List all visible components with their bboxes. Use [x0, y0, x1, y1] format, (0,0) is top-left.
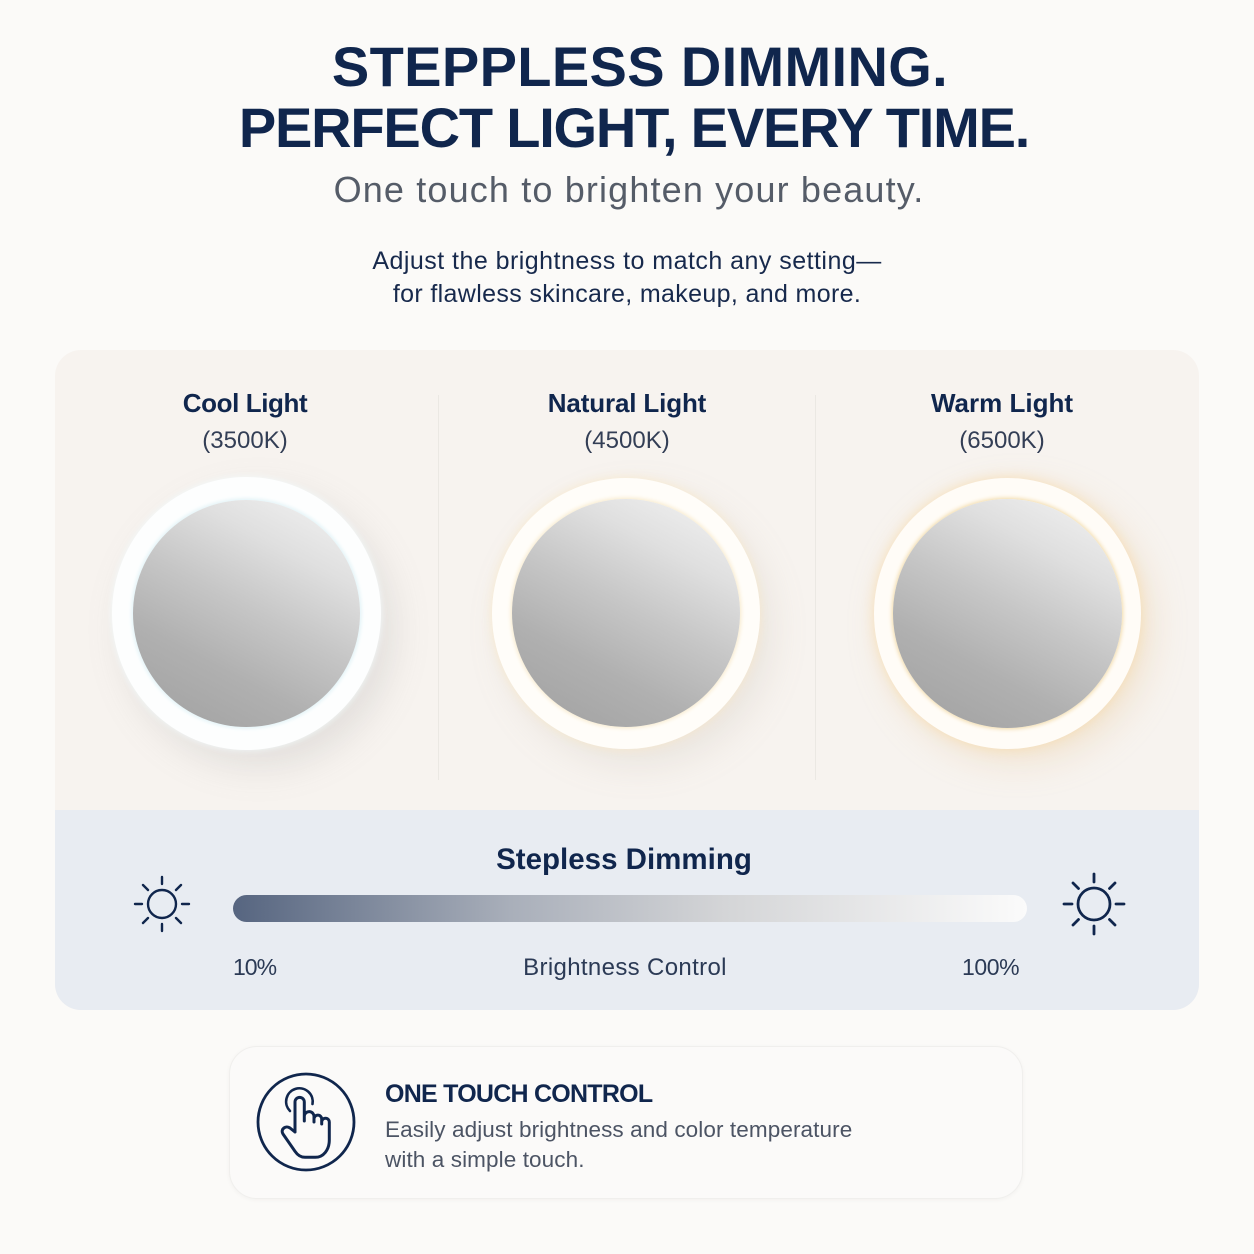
label: natural light: Natural Light: [548, 388, 706, 418]
description: for flawless skincare, makeup, and more.: [393, 280, 861, 308]
label: 10%: 10%: [233, 954, 276, 980]
label: 100%: 100%: [962, 954, 1019, 980]
card text: with a simple touch.: [385, 1147, 585, 1172]
brightness slider: [233, 895, 1027, 922]
panel: light modes: [55, 350, 1199, 1010]
label: warm light: Warm Light: [931, 388, 1073, 418]
label: cool light: (3500K): [202, 426, 288, 454]
panel: dimming: [55, 810, 1199, 1010]
icon: touch hand: [256, 1072, 356, 1172]
card text: Easily adjust brightness and color temperature: [385, 1117, 852, 1142]
icon: small sun: [134, 876, 190, 932]
label: warm light: (6500K): [959, 426, 1045, 454]
title: STEPPLESS DIMMING.: [332, 35, 948, 98]
label: cool light: [183, 388, 308, 454]
card text: [385, 1117, 852, 1172]
label: warm light: [931, 388, 1073, 454]
dimming heading: Stepless Dimming: [496, 843, 752, 876]
description: Adjust the brightness to match any setting—: [372, 247, 882, 275]
card heading: ONE TOUCH CONTROL: [385, 1080, 652, 1108]
mirror: cool: [112, 477, 399, 772]
label: natural light: [548, 388, 706, 454]
mirror: warm: [864, 470, 1162, 772]
label: natural light: (4500K): [584, 426, 670, 454]
icon: large sun: [1062, 872, 1126, 936]
description: [372, 247, 882, 308]
subtitle: One touch to brighten your beauty.: [334, 169, 924, 210]
title: [239, 35, 1029, 159]
title: PERFECT LIGHT, EVERY TIME.: [239, 96, 1029, 159]
label: brightness control: Brightness Control: [523, 954, 727, 981]
mirror: natural: [488, 474, 772, 764]
label: cool light: Cool Light: [183, 388, 307, 418]
card: one touch control: [229, 1046, 1023, 1199]
column dividers: [438, 395, 439, 780]
